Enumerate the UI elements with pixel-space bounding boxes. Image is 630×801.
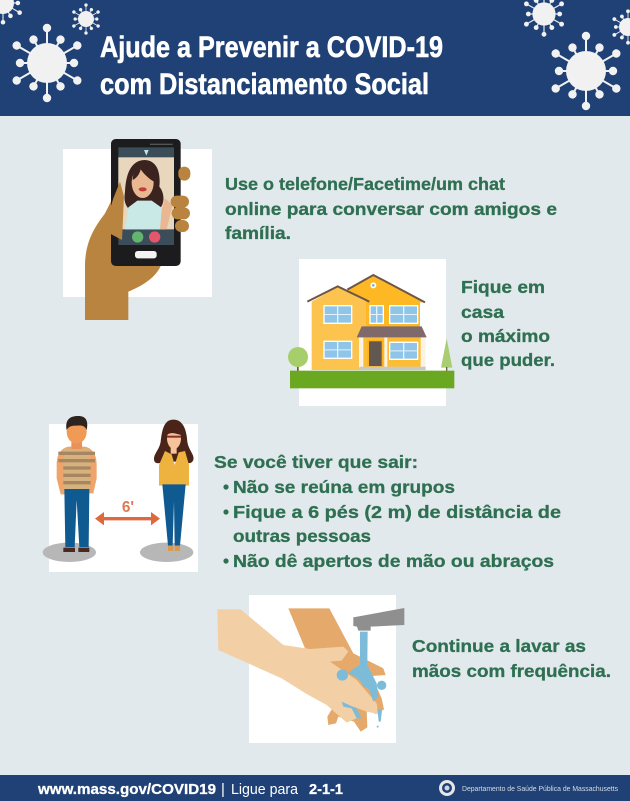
icon: virus large right (551, 33, 621, 109)
footer phone: Ligue para (231, 781, 299, 798)
text: handwashing tip: Continue a lavar as (412, 636, 586, 656)
icon: faucet (353, 608, 404, 631)
icon: double arrow (95, 512, 160, 525)
icon: state seal (439, 780, 455, 796)
icon: water (337, 632, 386, 728)
icon: virus large left (12, 25, 82, 101)
icon: virus far right (612, 10, 630, 44)
panel: handwashing illustration (217, 595, 404, 743)
icon: house (307, 275, 427, 370)
icon: trees (288, 338, 452, 372)
text: phone tip: Use o telefone/Facetime/um chat (225, 174, 505, 194)
icon: upper hand (217, 609, 378, 723)
department name: Departamento de Saúde Pública de Massachusetts (462, 784, 618, 793)
icon: virus small (72, 4, 100, 34)
text: handwashing tip (412, 636, 611, 681)
text: going out list (214, 452, 561, 571)
text: going out list: Não dê apertos de mão ou abraços (233, 551, 554, 571)
text: handwashing tip: mãos com frequência. (412, 661, 611, 681)
icon: lawn (290, 371, 454, 388)
divider text: | (221, 781, 225, 798)
footer number: 2-1-1 (309, 781, 343, 798)
text: stay home tip: o máximo (461, 326, 550, 346)
footer bar (0, 775, 630, 801)
icon: man (43, 416, 97, 562)
text: going out list: Não se reúna em grupos (233, 477, 455, 497)
text: stay home tip: que puder. (461, 350, 555, 370)
title: Ajude a Prevenir a COVID-19 (100, 31, 443, 64)
icon: virus top left (0, 0, 22, 24)
text: stay home tip: casa (461, 302, 504, 322)
panel: phone illustration (63, 139, 212, 320)
icon: fingers and thumb (103, 167, 190, 240)
panel: distancing illustration (43, 416, 198, 572)
title: com Distanciamento Social (100, 68, 429, 101)
icon: lower hand (288, 608, 386, 732)
text: going out list: outras pessoas (233, 526, 371, 546)
text: going out list: Fique a 6 pés (2 m) de distância de (233, 502, 561, 522)
text: phone tip: online para conversar com amigos e (225, 199, 557, 219)
icon: virus top right (524, 0, 564, 36)
panel: house illustration (288, 259, 454, 406)
footer url: www.mass.gov/COVID19 (37, 781, 216, 798)
label: six feet: 6' (122, 499, 134, 516)
title (100, 31, 443, 101)
icon: phone (111, 139, 181, 266)
header banner (0, 0, 630, 116)
text: stay home tip: Fique em (461, 277, 545, 297)
text: stay home tip (461, 277, 555, 370)
text: going out list: Se você tiver que sair: (214, 452, 418, 472)
icon: hand back (85, 182, 162, 320)
text: phone tip: família. (225, 223, 291, 243)
text: phone tip (225, 174, 557, 243)
icon: woman (140, 420, 194, 562)
